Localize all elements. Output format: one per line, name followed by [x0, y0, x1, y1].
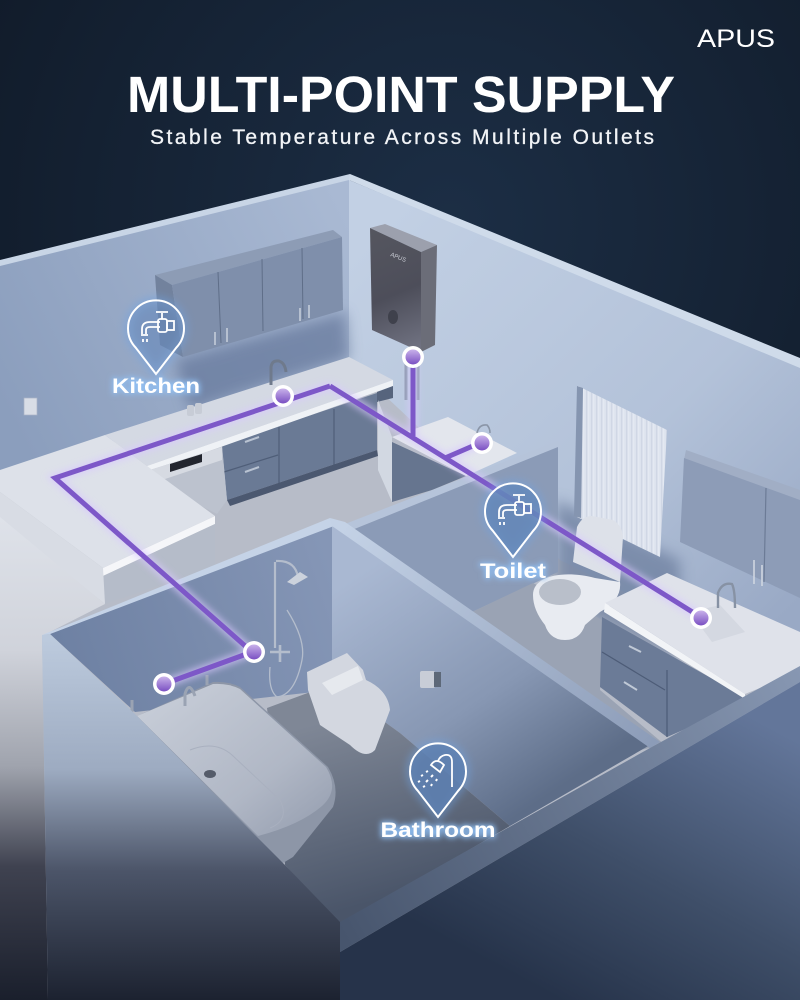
water heater	[370, 224, 437, 400]
pin: Kitchen: Kitchen	[112, 375, 200, 398]
label: Kitchen: Kitchen	[112, 375, 200, 398]
window blind	[574, 386, 667, 557]
title: MULTI-POINT SUPPLY	[127, 66, 675, 123]
icon: faucet	[498, 495, 531, 525]
bathroom right wall	[332, 525, 650, 826]
floor	[0, 355, 800, 1000]
bathroom upper cabinet	[680, 450, 800, 598]
label: Bathroom: Bathroom	[380, 819, 496, 842]
outlet node: kitchen sink	[272, 385, 294, 407]
right long wall	[349, 174, 800, 680]
outlet node: tub	[153, 673, 175, 695]
pipes	[55, 357, 702, 684]
bathroom toilet	[307, 653, 390, 754]
outlet node: small sink	[471, 432, 493, 454]
back kitchen wall	[0, 174, 350, 480]
pin: Bathroom: Bathroom	[380, 819, 496, 842]
bathroom wall top band	[42, 518, 660, 748]
toilet room floor	[472, 583, 665, 750]
outlet node: vanity	[690, 607, 712, 629]
wall shadow behind toilet	[556, 500, 680, 660]
bathtub	[132, 675, 336, 863]
pipe stroke	[55, 357, 702, 684]
toilet paper holder	[420, 671, 441, 688]
bathroom floor	[267, 684, 510, 925]
icon: shower head	[418, 755, 452, 787]
shower set	[270, 561, 308, 697]
outlet node: heater	[402, 346, 424, 368]
pipe glow	[55, 357, 702, 684]
peninsula counter	[0, 435, 215, 604]
pin: Toilet	[480, 483, 546, 583]
pin: Toilet: Toilet	[480, 560, 546, 583]
jars	[187, 403, 202, 416]
upper kitchen cabinets	[155, 230, 349, 410]
small sink counter	[378, 400, 517, 502]
logo: APUS: APUS	[697, 25, 775, 53]
subtitle: Stable Temperature Across Multiple Outlets	[150, 126, 654, 149]
front right wall	[340, 666, 800, 1000]
label: Toilet: Toilet	[480, 560, 546, 583]
pin: Bathroom	[380, 743, 496, 842]
vanity	[600, 573, 800, 737]
light switch	[24, 398, 37, 415]
front left wall	[42, 634, 340, 1000]
toilet room wall	[345, 441, 561, 612]
oven	[150, 447, 227, 514]
bathroom back wall	[50, 525, 332, 712]
kitchen counter and base cabinets	[105, 357, 393, 506]
pin: Kitchen	[112, 300, 200, 398]
toilet	[533, 516, 623, 640]
icon: faucet	[141, 312, 174, 342]
outlet node: shower	[243, 641, 265, 663]
water heater: APUS	[389, 252, 407, 264]
left floor strip	[0, 517, 105, 1000]
kitchen faucet	[271, 361, 286, 385]
